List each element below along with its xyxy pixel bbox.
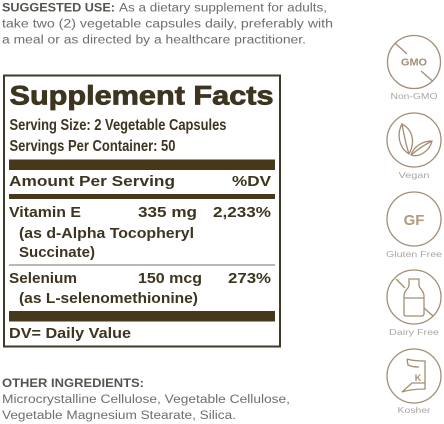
medium divider bar [9, 194, 275, 199]
suggested use text: As a dietary supplement for adults, [119, 2, 327, 14]
other ingredients text: Vegetable Magnesium Stearate, Silica. [2, 410, 236, 422]
row: vitamin E [9, 204, 271, 261]
icon: vegan leaf [387, 113, 441, 180]
icon: non-GMO [388, 36, 440, 101]
icon: non-GMO: Non-GMO [390, 91, 438, 101]
row: vitamin E: 335 mg [138, 204, 197, 221]
table header: %DV [232, 173, 271, 190]
daily value note: DV= Daily Value [9, 325, 131, 342]
suggested use text: take two (2) vegetable capsules daily, preferably with [2, 18, 333, 30]
thick divider bar [9, 160, 275, 170]
row: vitamin E: 2,233% [213, 204, 271, 221]
icon: kosher: Kosher [398, 405, 431, 415]
icon: gluten free: GF [404, 212, 424, 229]
other ingredients text [2, 378, 290, 422]
row: selenium [9, 270, 271, 307]
row: selenium: Selenium [9, 270, 77, 287]
other ingredients text: Microcrystalline Cellulose, Vegetable Cellulose, [2, 394, 290, 406]
suggested use text [2, 2, 333, 46]
other ingredients text: OTHER INGREDIENTS: [2, 378, 144, 390]
row: selenium: 273% [228, 270, 271, 287]
table header [9, 173, 271, 190]
icon: gluten free: Gluten Free [386, 249, 442, 259]
icon: gluten free [386, 192, 442, 259]
row: vitamin E: Succinate) [19, 244, 95, 261]
thick divider bar [9, 311, 275, 322]
row: vitamin E: (as d-Alpha Tocopheryl [19, 225, 194, 242]
icon: kosher [387, 349, 441, 415]
heading: supplement facts: Supplement Facts [10, 80, 274, 110]
serving information [10, 117, 227, 155]
suggested use text: a meal or as directed by a healthcare practitioner. [2, 34, 306, 46]
row: selenium: 150 mcg [138, 270, 202, 287]
table header: Amount Per Serving [9, 173, 175, 190]
serving information: Serving Size: 2 Vegetable Capsules [10, 117, 227, 134]
row: vitamin E: Vitamin E [9, 204, 81, 221]
icon: non-GMO: GMO [401, 58, 427, 68]
icon: dairy free bottle [387, 270, 441, 337]
row: selenium: (as L-selenomethionine) [19, 290, 198, 307]
icon: kosher: K [415, 373, 422, 383]
icon: dairy free bottle: Dairy Free [389, 327, 439, 337]
serving information: Servings Per Container: 50 [10, 138, 176, 155]
panel: supplement facts [4, 76, 280, 346]
icon: vegan leaf: Vegan [398, 170, 430, 180]
suggested use text: SUGGESTED USE: [2, 2, 115, 14]
